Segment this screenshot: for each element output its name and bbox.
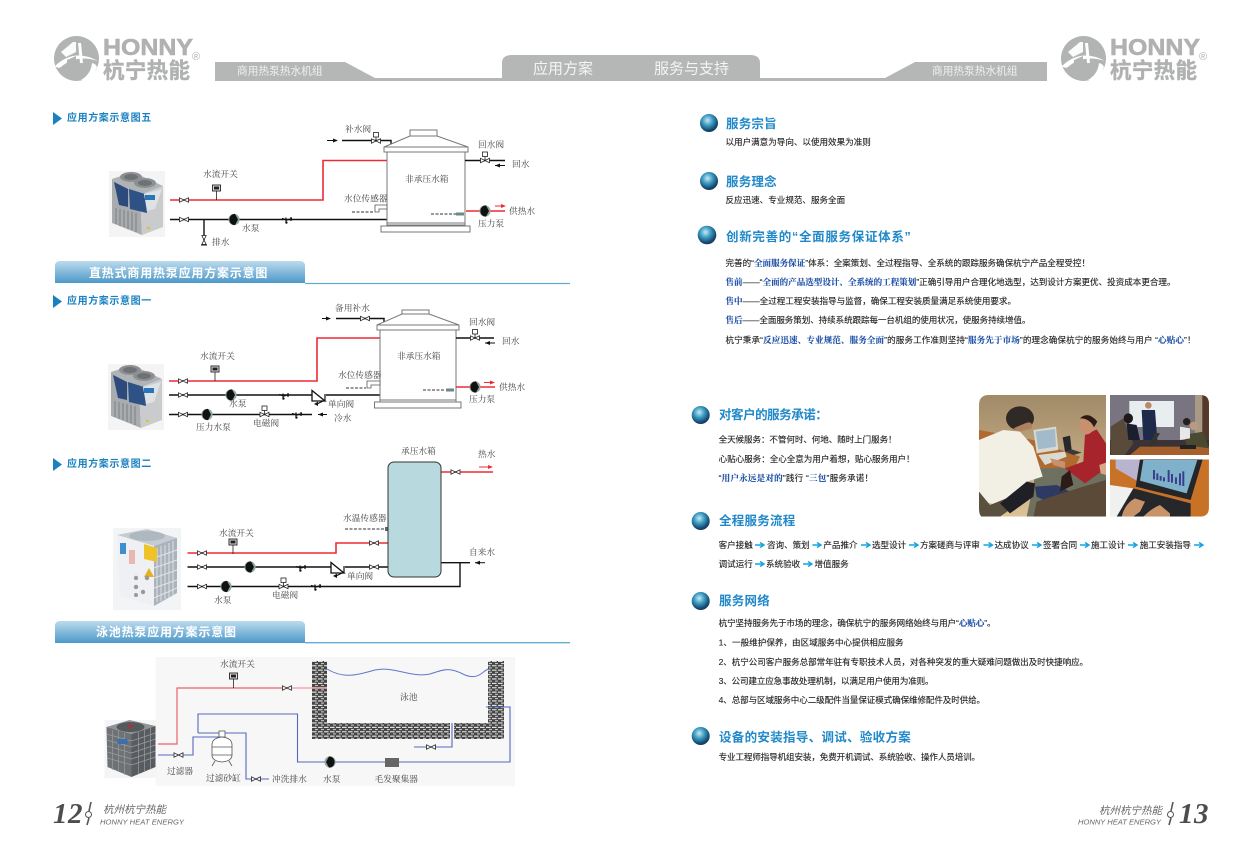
block: service process: 全程服务流程 bbox=[719, 513, 796, 528]
diagram five: 回水 bbox=[512, 158, 530, 169]
subheading: diagram five: 应用方案示意图五 bbox=[67, 111, 152, 124]
diagram five: 排水 bbox=[212, 236, 230, 247]
block: service process: 调试运行 bbox=[719, 558, 753, 569]
diagram one bbox=[108, 302, 525, 432]
subheading: diagram one: 应用方案示意图一 bbox=[67, 294, 152, 307]
block: service process bbox=[692, 512, 1203, 569]
page number 12: 12 bbox=[53, 798, 83, 830]
header band: 应用方案 bbox=[533, 60, 593, 78]
block: service process: 方案磋商与评审 bbox=[920, 539, 980, 550]
header band: 商用热泵热水机组 bbox=[237, 64, 323, 78]
left logo: HONNY bbox=[103, 34, 193, 60]
photo: presentation bbox=[1110, 395, 1209, 455]
block: installation guidance: 专业工程师指导机组安装，免费开机调试、系统验收、操作人员培训。 bbox=[719, 751, 980, 762]
diagram five: 非承压水箱 bbox=[405, 173, 449, 184]
left logo bbox=[54, 34, 200, 83]
block: customer service promise: 全天候服务：不管何时、何地、随时上门服务！ bbox=[719, 434, 897, 444]
block: service network: 服务网络 bbox=[719, 593, 770, 608]
block: customer service promise: 心贴心服务：全心全意为用户着想，贴心服务用户！ bbox=[719, 453, 915, 464]
left logo: ® bbox=[192, 51, 200, 63]
section banner: direct heating bbox=[55, 261, 570, 284]
diagram two: 承压水箱 bbox=[401, 445, 436, 456]
subheading: diagram two: 应用方案示意图二 bbox=[67, 457, 152, 470]
block: service process: 系统验收 bbox=[766, 558, 801, 569]
block: service tenet: 以用户满意为导向、以使用效果为准则 bbox=[726, 136, 871, 147]
pool diagram: 过滤器 bbox=[167, 765, 193, 776]
block: full service guarantee system bbox=[698, 226, 1196, 345]
page number 13: 杭州杭宁热能 bbox=[1099, 805, 1163, 817]
block: customer service promise bbox=[692, 406, 915, 483]
pool diagram: 冲洗排水 bbox=[272, 773, 307, 784]
block: installation guidance bbox=[692, 727, 980, 762]
block: full service guarantee system: 售前——“全面的产品选型设计、全系统的工程策划”正确引导用户合理化地选型，达到设计方案更优、投资成本更合理。 bbox=[726, 276, 1176, 287]
page number 12: HONNY HEAT ENERGY bbox=[100, 818, 185, 826]
pool diagram: 毛发聚集器 bbox=[374, 773, 418, 784]
diagram five: 水流开关 bbox=[203, 168, 238, 179]
page number 12: 杭州杭宁热能 bbox=[103, 804, 167, 816]
block: full service guarantee system: 创新完善的“全面服务保证体系” bbox=[726, 229, 911, 244]
page number 12 bbox=[53, 798, 185, 830]
block: service process: 签署合同 bbox=[1043, 539, 1077, 550]
diagram five: 水泵 bbox=[242, 222, 260, 233]
block: service process: 施工设计 bbox=[1091, 539, 1126, 550]
block: service network: 杭宁坚持服务先于市场的理念，确保杭宁的服务网络始终与用户“心贴心”。 bbox=[719, 617, 996, 628]
block: service tenet: 服务宗旨 bbox=[726, 116, 777, 131]
diagram five: 压力泵 bbox=[478, 218, 504, 228]
diagram two: 热水 bbox=[478, 448, 496, 459]
diagram two: 自来水 bbox=[469, 546, 495, 557]
diagram five: 补水阀 bbox=[345, 123, 371, 134]
page number 13: 13 bbox=[1179, 798, 1209, 830]
photo: laptop bbox=[1110, 459, 1209, 517]
block: full service guarantee system: 售中——全过程工程安装指导与监督，确保工程安装质量满足系统使用要求。 bbox=[726, 295, 1016, 306]
subheading: diagram two bbox=[53, 457, 152, 471]
pool walls bbox=[312, 661, 504, 739]
block: service concept: 服务理念 bbox=[726, 174, 777, 189]
diagram one: 非承压水箱 bbox=[397, 350, 441, 361]
diagram two: 电磁阀 bbox=[272, 589, 298, 600]
diagram one: 回水 bbox=[502, 335, 520, 346]
header band: 服务与支持 bbox=[654, 60, 729, 78]
block: service tenet bbox=[700, 114, 871, 147]
block: service concept: 反应迅速、专业规范、服务全面 bbox=[726, 194, 846, 205]
page number 13 bbox=[1078, 798, 1209, 830]
subheading: diagram one bbox=[53, 294, 152, 308]
diagram one: 压力泵 bbox=[469, 393, 495, 404]
block: service process: 产品推介 bbox=[823, 539, 858, 550]
photo collage bbox=[979, 395, 1209, 517]
block: service process: 客户接触 bbox=[719, 539, 753, 550]
diagram two: 水温传感器 bbox=[343, 512, 387, 523]
block: service network: 3、公司建立应急事故处理机制，以满足用户使用为准则。 bbox=[719, 675, 934, 686]
block: installation guidance: 设备的安装指导、调试、验收方案 bbox=[719, 730, 911, 744]
right logo: 杭宁热能 bbox=[1110, 58, 1197, 83]
header band: 商用热泵热水机组 bbox=[932, 64, 1018, 78]
diagram five bbox=[109, 123, 535, 247]
pool diagram: 过滤砂缸 bbox=[206, 772, 241, 783]
diagram one: 冷水 bbox=[334, 412, 352, 423]
block: full service guarantee system: 杭宁秉承“反应迅速、专业规范、服务全面”的服务工作准则坚持“服务先于市场”的理念确保杭宁的服务始终与用户 “心贴心”！ bbox=[726, 334, 1196, 345]
subheading: diagram five bbox=[53, 111, 152, 125]
block: service process: 咨询、策划 bbox=[767, 539, 810, 550]
diagram one: 备用补水 bbox=[335, 302, 370, 313]
page number 13: HONNY HEAT ENERGY bbox=[1078, 818, 1162, 826]
diagram two bbox=[113, 445, 496, 610]
block: customer service promise: “用户永远是对的”践行 “三包”服务承诺！ bbox=[719, 472, 873, 483]
diagram two: 单向阀 bbox=[347, 570, 373, 581]
diagram one: 水位传感器 bbox=[338, 369, 382, 380]
block: service process: 施工安装指导 bbox=[1140, 539, 1191, 550]
diagram one: 电磁阀 bbox=[253, 417, 279, 428]
header band bbox=[215, 55, 1047, 81]
left logo: 杭宁热能 bbox=[103, 58, 190, 83]
right logo bbox=[1061, 34, 1207, 83]
block: service network: 4、总部与区域服务中心二级配件当量保证模式确保维修配件及时供给。 bbox=[719, 694, 985, 705]
diagram one: 水流开关 bbox=[200, 350, 235, 361]
block: service network: 2、杭宁公司客户服务总部常年驻有专职技术人员，对各种突发的重大疑难问题做出及时快捷响应。 bbox=[719, 656, 1088, 667]
diagram one: 回水阀 bbox=[469, 316, 495, 327]
block: service concept bbox=[700, 172, 846, 205]
pool diagram bbox=[104, 657, 515, 786]
right logo: HONNY bbox=[1110, 34, 1200, 60]
pool diagram: 水流开关 bbox=[220, 658, 255, 669]
diagram two: 水流开关 bbox=[219, 527, 254, 538]
block: service process: 选型设计 bbox=[872, 539, 907, 550]
diagram five: 供热水 bbox=[509, 205, 535, 216]
right logo: ® bbox=[1199, 51, 1207, 63]
section banner: pool: 泳池热泵应用方案示意图 bbox=[96, 624, 237, 639]
photo: meeting at computer bbox=[979, 395, 1106, 517]
block: service process: 增值服务 bbox=[814, 558, 849, 569]
diagram one: 压力水泵 bbox=[196, 421, 231, 432]
block: service network: 1、一般维护保养，由区域服务中心提供相应服务 bbox=[719, 637, 904, 648]
diagram one: 水泵 bbox=[229, 398, 247, 408]
section banner: direct heating: 直热式商用热泵应用方案示意图 bbox=[89, 265, 268, 280]
block: full service guarantee system: 售后——全面服务策划、持续系统跟踪每一台机组的使用状况，使服务持续增值。 bbox=[726, 314, 1030, 325]
block: customer service promise: 对客户的服务承诺： bbox=[719, 407, 828, 422]
tank bbox=[374, 310, 461, 408]
diagram one: 供热水 bbox=[499, 381, 525, 392]
section banner: pool bbox=[55, 621, 570, 643]
pool diagram: 水泵 bbox=[323, 773, 341, 784]
pressure tank bbox=[388, 462, 441, 577]
pool diagram: 泳池 bbox=[400, 691, 418, 702]
diagram two: 水泵 bbox=[214, 594, 232, 605]
diagram five: 水位传感器 bbox=[344, 192, 388, 204]
diagram five: 回水阀 bbox=[478, 138, 504, 150]
diagram one: 单向阀 bbox=[328, 398, 354, 409]
block: service network bbox=[692, 592, 1088, 705]
block: full service guarantee system: 完善的“全面服务保证”体系：全案策划、全过程指导、全系统的跟踪服务确保杭宁产品全程受控！ bbox=[726, 257, 1090, 268]
sand filter bbox=[212, 731, 232, 766]
tank bbox=[381, 130, 470, 232]
arrow row one bbox=[755, 542, 1203, 566]
block: service process: 达成协议 bbox=[994, 539, 1029, 550]
